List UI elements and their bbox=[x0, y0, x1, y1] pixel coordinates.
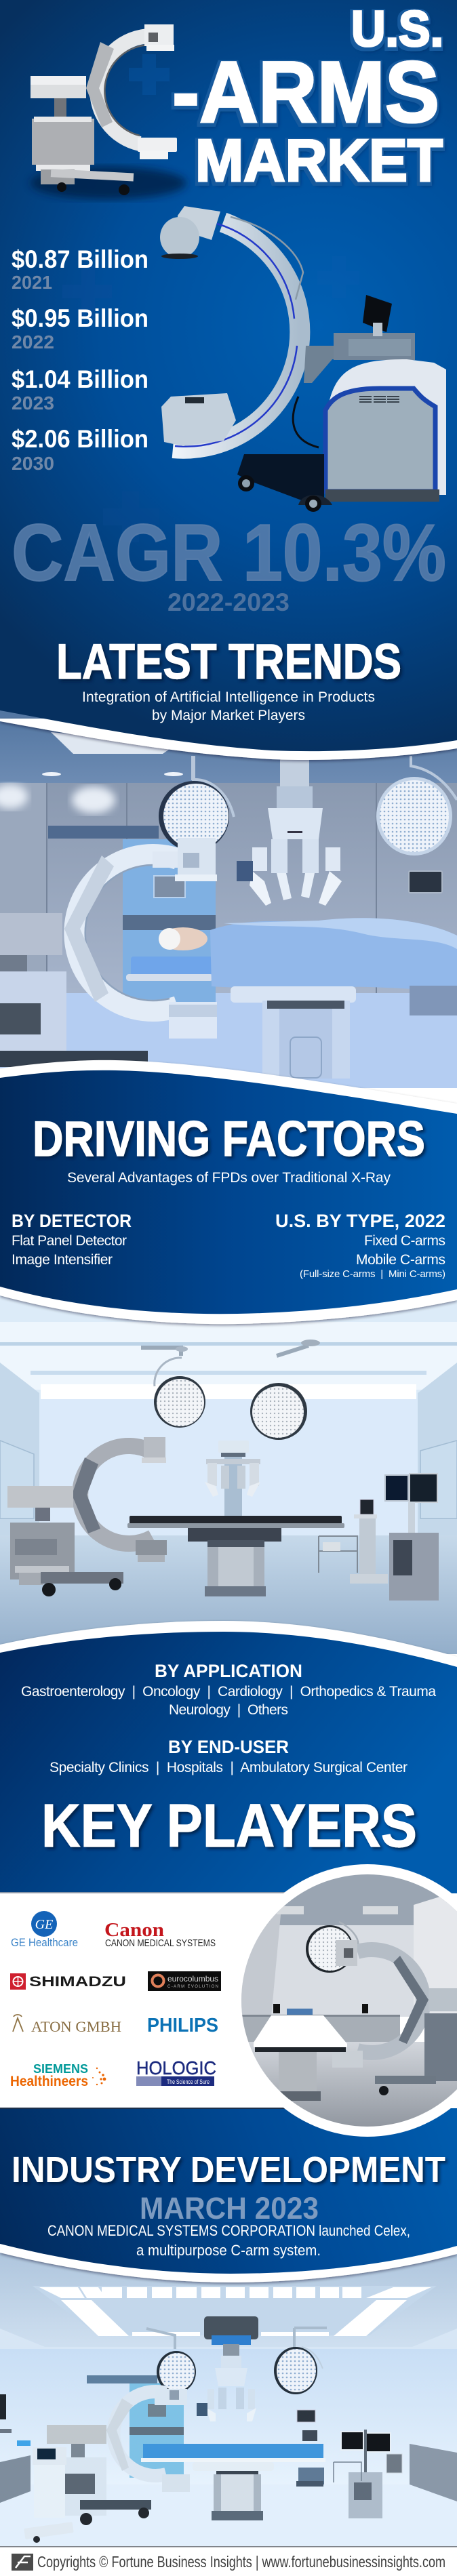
surgical light right bbox=[411, 756, 457, 800]
logo: Eurocolumbus: C-ARM EVOLUTION bbox=[167, 1985, 218, 1989]
logo: Aton GmbH: ATON GMBH bbox=[31, 2018, 121, 2035]
surgical lights bbox=[146, 2328, 327, 2394]
segment: by end-user bbox=[49, 1737, 408, 1775]
panel: key players logos on white bbox=[0, 1864, 457, 2137]
robot bbox=[197, 2316, 258, 2421]
segment: by detector bbox=[12, 1211, 132, 1268]
value 2030: $2.06 Billion bbox=[12, 425, 148, 453]
patient on table bbox=[126, 918, 457, 990]
logo: Canon Medical Systems bbox=[104, 1920, 216, 1949]
logo: Hologic: The Science of Sure bbox=[167, 2078, 210, 2085]
wall devices bbox=[0, 2394, 402, 2473]
segment: by application: Gastroenterology | Oncology | Cardiology | Orthopedics & Trauma bbox=[21, 1684, 436, 1699]
segment: by detector: Image Intensifier bbox=[12, 1252, 113, 1268]
heading: key players: KEY PLAYERS bbox=[41, 1792, 417, 1860]
latest trends description bbox=[82, 689, 375, 723]
decorative medical crosses bbox=[62, 54, 359, 542]
value 2022: $0.95 Billion bbox=[12, 304, 148, 332]
panel: driving factors bbox=[0, 1060, 457, 1324]
main title bbox=[172, 1, 443, 194]
development description bbox=[47, 2222, 410, 2259]
C-arm base unit bbox=[0, 913, 148, 1067]
panel: top blue hero with title bbox=[0, 0, 457, 760]
value 2021: $0.87 Billion bbox=[12, 245, 148, 273]
segment: U.S. by type 2022: (Full-size C-arms | Mini C-arms) bbox=[300, 1268, 445, 1280]
segment: by application: BY APPLICATION bbox=[155, 1661, 302, 1681]
latest trends description: by Major Market Players bbox=[152, 708, 305, 723]
segment: U.S. by type 2022 bbox=[275, 1211, 445, 1280]
CAGR figure: 2022-2023 bbox=[167, 588, 290, 616]
left cabinet bbox=[0, 2455, 31, 2503]
logo: GE Healthcare: GE bbox=[35, 1917, 53, 1932]
monitors and carts bbox=[319, 1474, 439, 1601]
segment: U.S. by type 2022: U.S. BY TYPE, 2022 bbox=[275, 1211, 445, 1231]
table pedestal bbox=[231, 986, 356, 1079]
icon: small mobile C-arm unit bbox=[31, 24, 186, 199]
operating table bbox=[127, 1516, 344, 1596]
value 2030: 2030 bbox=[12, 453, 54, 474]
segment: by end-user: BY END-USER bbox=[168, 1737, 289, 1757]
main title: -ARMS bbox=[172, 44, 439, 141]
photo: bright room with C-arm and table (driving factors) bbox=[0, 1288, 457, 1654]
blue operating table bbox=[141, 2444, 325, 2520]
logo: Aton GmbH bbox=[13, 2015, 121, 2035]
logo: Canon Medical Systems: Canon bbox=[104, 1920, 164, 1941]
value 2022: 2022 bbox=[12, 331, 54, 353]
latest trends description: Integration of Artificial Intelligence in Products bbox=[82, 689, 375, 705]
logo: GE Healthcare: GE Healthcare bbox=[11, 1936, 78, 1949]
main title: U.S. bbox=[351, 1, 443, 57]
photo: operating room with robot and C-arm (latest trends) bbox=[0, 705, 457, 1088]
segment: U.S. by type 2022: Fixed C-arms bbox=[364, 1233, 445, 1249]
surgical light left bbox=[192, 780, 234, 817]
panel: footer copyright bbox=[0, 2546, 457, 2576]
anesthesia machine bbox=[17, 2440, 74, 2543]
main title: MARKET bbox=[195, 127, 443, 194]
photo: round C-arm room bbox=[237, 1871, 457, 2130]
value 2021: 2021 bbox=[12, 272, 52, 293]
C-arm base bbox=[7, 1486, 123, 1596]
value 2021 bbox=[12, 245, 148, 293]
segment: by detector: BY DETECTOR bbox=[12, 1211, 132, 1231]
surgical robot bbox=[250, 749, 342, 906]
photo: white operating room with blue table (industry development) bbox=[0, 2237, 457, 2549]
value 2023: 2023 bbox=[12, 393, 54, 414]
panel: industry development bbox=[0, 2101, 457, 2282]
ceiling lights bbox=[141, 1340, 320, 1440]
market values by year bbox=[12, 245, 148, 474]
value 2022 bbox=[12, 304, 148, 353]
C-arm bbox=[106, 2389, 190, 2492]
value 2023 bbox=[12, 365, 148, 414]
panel: segments and key players bbox=[0, 1621, 457, 1898]
driving factors description: Several Advantages of FPDs over Traditional X-Ray bbox=[67, 1170, 391, 1186]
door bbox=[123, 839, 216, 1002]
segment: by end-user: Specialty Clinics | Hospitals | Ambulatory Surgical Center bbox=[49, 1760, 408, 1775]
logo: Eurocolumbus: eurocolumbus bbox=[167, 1974, 218, 1984]
logo: Eurocolumbus bbox=[148, 1971, 221, 1991]
logo: Hologic: HOLOGIC bbox=[136, 2057, 216, 2078]
logo: GE Healthcare bbox=[11, 1911, 78, 1949]
robot tower bbox=[205, 1441, 260, 1516]
ceiling light strip bbox=[39, 2287, 431, 2336]
logo: Philips: PHILIPS bbox=[147, 2015, 218, 2036]
logo: Shimadzu bbox=[10, 1973, 126, 1990]
C-arm base bbox=[47, 2425, 151, 2525]
icon: Fortune Business Insights logo bbox=[12, 2554, 33, 2571]
value 2023: $1.04 Billion bbox=[12, 365, 148, 393]
logo: Siemens Healthineers: SIEMENS bbox=[33, 2062, 88, 2076]
logo: Shimadzu: SHIMADZU bbox=[29, 1974, 126, 1990]
segment: U.S. by type 2022: Mobile C-arms bbox=[356, 1252, 445, 1268]
segment: by application: Neurology | Others bbox=[169, 1702, 288, 1718]
icon: large blue-trim C-arm unit bbox=[160, 206, 446, 512]
logo: Siemens Healthineers: Healthineers bbox=[10, 2074, 88, 2089]
value 2030 bbox=[12, 425, 148, 474]
segment: by application bbox=[21, 1661, 436, 1718]
heading: latest trends: LATEST TRENDS bbox=[56, 635, 401, 689]
right equipment bbox=[296, 2430, 457, 2518]
logo: Siemens Healthineers bbox=[10, 2062, 106, 2089]
logo: Canon Medical Systems: CANON MEDICAL SYSTEMS bbox=[105, 1938, 216, 1949]
grey C-arm bbox=[72, 1437, 167, 1562]
side cart bbox=[410, 986, 457, 1015]
door bbox=[130, 2383, 184, 2478]
date: march 2023: MARCH 2023 bbox=[140, 2191, 319, 2226]
C-arm bbox=[64, 838, 217, 1039]
logo: Hologic bbox=[136, 2057, 216, 2086]
development description: a multipurpose C-arm system. bbox=[136, 2242, 321, 2259]
segment: by detector: Flat Panel Detector bbox=[12, 1233, 127, 1249]
